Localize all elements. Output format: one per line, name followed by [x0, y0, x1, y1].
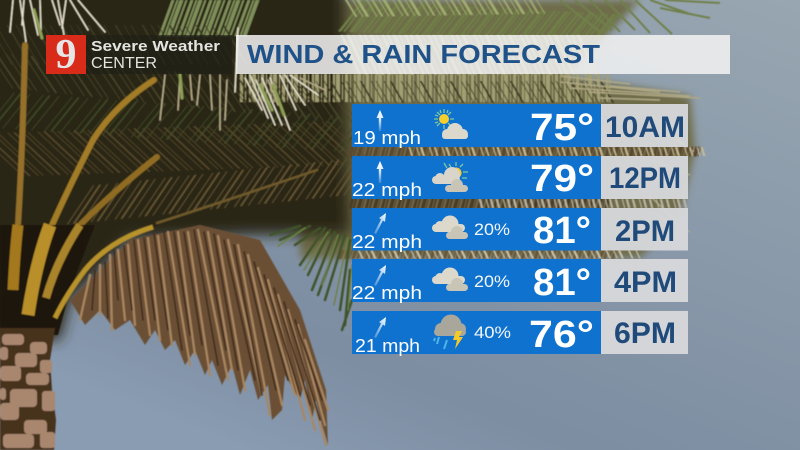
wind arrow: [374, 317, 386, 338]
row: 2PM: [352, 208, 688, 252]
time: 12PM: [609, 162, 681, 195]
logo name: Severe Weather: [91, 38, 220, 55]
dark crown shadow: [0, 0, 350, 340]
wind arrow: [376, 161, 384, 183]
temperature: 81°: [533, 262, 591, 304]
palm trunk: [0, 328, 56, 450]
channel 9 badge: [46, 32, 86, 78]
icon: cloud with sun: [432, 162, 468, 192]
forecast table: [352, 104, 688, 356]
row: 6PM: [352, 311, 688, 356]
yellow frond stems: [18, 45, 317, 225]
rain chance: 20%: [474, 220, 510, 239]
row gap strands: [340, 152, 705, 254]
upper fronds base: [150, 0, 695, 258]
time: 2PM: [615, 215, 675, 248]
icon: clouds: [432, 216, 468, 239]
icon: thunderstorm: [434, 314, 466, 349]
wind speed: 21 mph: [355, 336, 420, 356]
green hanging frond: [270, 226, 352, 330]
wind speed: 19 mph: [353, 128, 421, 148]
row: 4PM: [352, 259, 688, 304]
crown base: [0, 225, 95, 335]
logo: [46, 32, 232, 78]
rain chance: 40%: [474, 323, 511, 342]
temperature: 79°: [530, 158, 594, 200]
time: 4PM: [614, 266, 677, 299]
channel 9 badge: 9: [56, 32, 76, 78]
logo subtitle: CENTER: [91, 55, 157, 72]
logo text backing: [86, 35, 232, 74]
wind arrow: [374, 265, 386, 286]
brown hanging frond: [70, 225, 328, 445]
wind speed: 22 mph: [352, 232, 422, 252]
time: 6PM: [614, 317, 676, 350]
icon: sun and cloud: [434, 109, 468, 139]
wind speed: 22 mph: [352, 283, 422, 303]
title bar: [236, 35, 730, 74]
lower yellow stems: [13, 225, 153, 318]
rain chance: 20%: [474, 272, 510, 291]
time: 10AM: [605, 111, 685, 144]
green frond strands top: [165, 0, 720, 232]
wind speed: 22 mph: [352, 180, 422, 200]
wind arrow: [374, 213, 386, 234]
temperature: 75°: [530, 107, 594, 149]
temperature: 81°: [533, 210, 591, 252]
row: 10AM: [352, 104, 688, 149]
title: WIND & RAIN FORECAST: [247, 41, 600, 69]
bright white frond strands: [10, 0, 325, 130]
temperature: 76°: [529, 314, 594, 356]
dark frond texture: [0, 45, 360, 205]
row: 12PM: [352, 156, 688, 200]
wind arrow: [376, 110, 384, 131]
icon: clouds: [432, 268, 468, 291]
